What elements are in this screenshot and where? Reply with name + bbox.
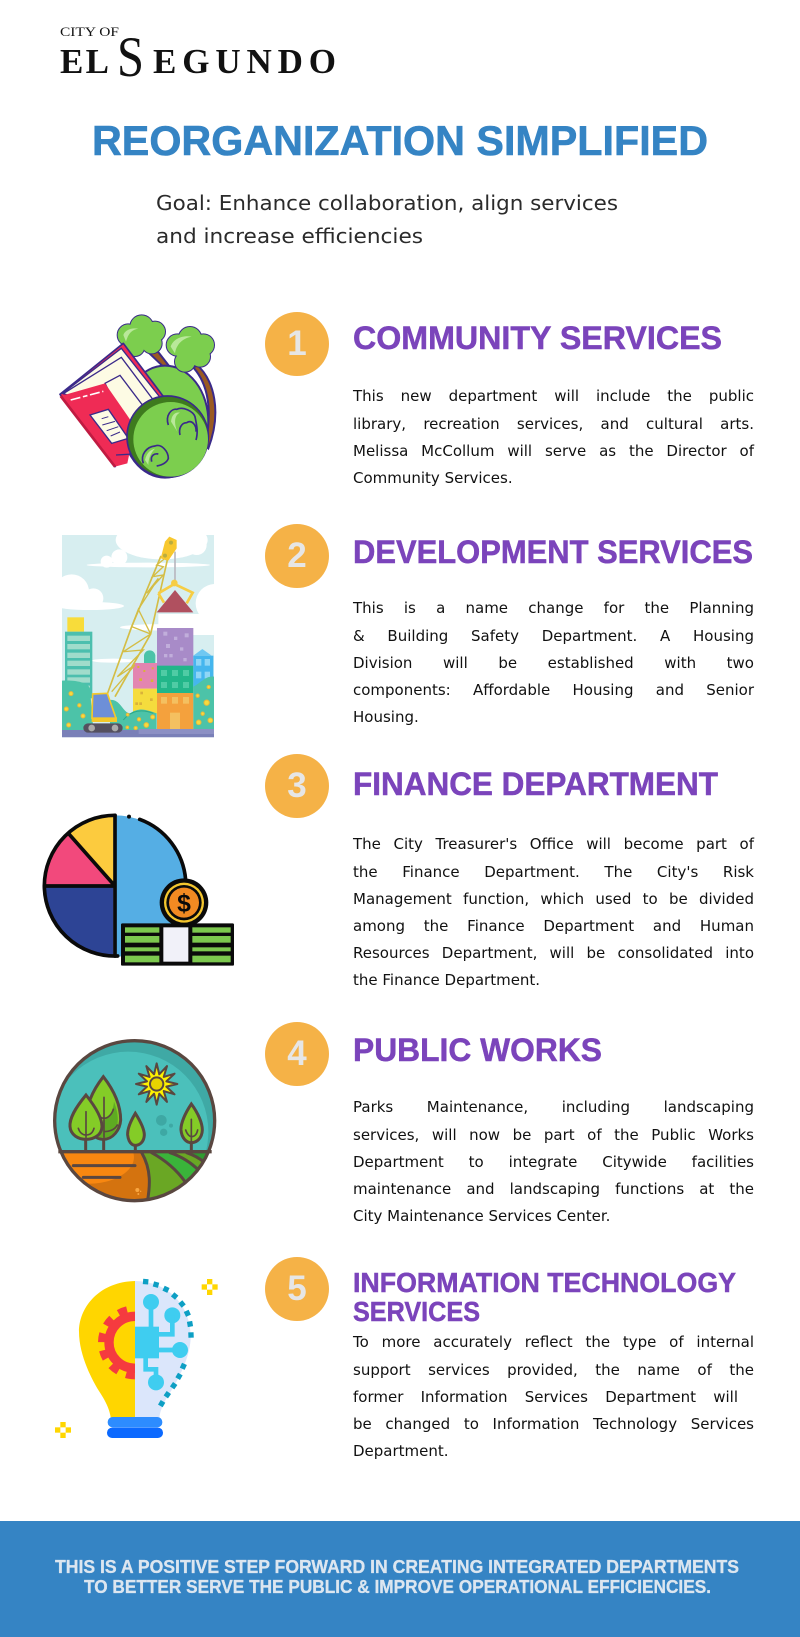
number badge 5 (265, 1257, 329, 1321)
logo: City of El Segundo (60, 24, 336, 89)
text: finance department description: the Finance Department. The City's Risk (353, 863, 754, 881)
number badge 2 (265, 524, 329, 588)
heading: public works: PUBLIC WORKS (353, 1032, 602, 1068)
text: information technology services description: be changed to Information Technology Services (353, 1415, 754, 1433)
text: community services description: library, recreation services, and cultural arts. (353, 415, 754, 433)
text: development services description: Division will be established with two (353, 654, 754, 672)
text: finance department description (352, 835, 754, 989)
icon: book and trees (59, 314, 216, 479)
icon: landscape with trees and sun (53, 1039, 216, 1202)
icon: crane and city buildings (62, 535, 214, 738)
text: information technology services description (352, 1333, 754, 1460)
goal statement: Goal: Enhance collaboration, align services (156, 191, 618, 215)
heading: community services: COMMUNITY SERVICES (353, 320, 722, 356)
text: public works description: City Maintenance Services Center. (353, 1207, 610, 1225)
number badge 1: 1 (287, 324, 307, 363)
heading: information technology services (353, 1267, 736, 1327)
heading: information technology services: INFORMATION TECHNOLOGY (353, 1267, 736, 1298)
panel: community services (59, 312, 754, 487)
text: information technology services description: To more accurately reflect the type of internal (353, 1333, 754, 1351)
footer message: THIS IS A POSITIVE STEP FORWARD IN CREATING INTEGRATED DEPARTMENTS (55, 1557, 739, 1577)
icon: pie chart with coin and money: $ (177, 890, 191, 917)
text: community services description (352, 387, 754, 487)
panel: public works (53, 1022, 754, 1225)
text: finance department description: Resources Department, will be consolidated into (353, 944, 754, 962)
text: information technology services description: Department. (353, 1442, 449, 1460)
text: community services description: This new department will include the public (353, 387, 754, 405)
number badge 5: 5 (287, 1269, 307, 1308)
text: community services description: Melissa McCollum will serve as the Director of (353, 442, 754, 460)
text: finance department description: the Finance Department. (353, 971, 540, 989)
text: public works description: Department to integrate Citywide facilities (353, 1153, 754, 1171)
footer banner (0, 1521, 800, 1637)
text: information technology services description: support services provided, the name of the (353, 1361, 754, 1379)
goal statement (156, 191, 618, 248)
text: public works description: services, will now be part of the Public Works (353, 1126, 754, 1144)
heading: development services: DEVELOPMENT SERVICES (353, 534, 753, 570)
text: development services description: This is a name change for the Planning (353, 599, 754, 617)
number badge 3: 3 (287, 766, 307, 805)
panel: development services (62, 524, 754, 738)
text: development services description: & Building Safety Department. A Housing (353, 627, 754, 645)
number badge 2: 2 (287, 536, 307, 575)
footer message: TO BETTER SERVE THE PUBLIC & IMPROVE OPERATIONAL EFFICIENCIES. (84, 1577, 711, 1597)
text: development services description: Housing. (353, 708, 419, 726)
footer message (55, 1557, 739, 1597)
text: finance department description: among the Finance Department and Human (353, 917, 754, 935)
icon: pie chart with coin and money (42, 814, 234, 966)
logo: City of El Segundo: EGUNDO (153, 42, 336, 81)
number badge 3 (265, 754, 329, 818)
text: public works description: maintenance and landscaping functions at the (353, 1180, 754, 1198)
heading: finance department: FINANCE DEPARTMENT (353, 766, 718, 802)
text: finance department description: Management function, which used to be divided (353, 890, 754, 908)
text: information technology services description: former Information Services Department will (353, 1388, 738, 1406)
text: development services description: components: Affordable Housing and Senior (353, 681, 754, 699)
logo: City of El Segundo: S (117, 26, 144, 89)
text: community services description: Community Services. (353, 469, 513, 487)
goal statement: and increase efficiencies (156, 224, 423, 248)
title: REORGANIZATION SIMPLIFIED (92, 117, 708, 164)
number badge 4 (265, 1022, 329, 1086)
number badge 1 (265, 312, 329, 376)
panel: information technology services (55, 1257, 754, 1460)
text: finance department description: The City Treasurer's Office will become part of (353, 835, 754, 853)
text: development services description (352, 599, 754, 726)
heading: information technology services: SERVICES (353, 1296, 480, 1327)
text: public works description: Parks Maintenance, including landscaping (353, 1098, 754, 1116)
icon: light bulb with gear and circuit (55, 1278, 218, 1438)
logo: City of El Segundo: EL (60, 42, 109, 81)
logo: City of El Segundo: CITY OF (60, 24, 119, 39)
text: public works description (353, 1098, 754, 1225)
number badge 4: 4 (287, 1034, 307, 1073)
panel: finance department (42, 754, 754, 989)
